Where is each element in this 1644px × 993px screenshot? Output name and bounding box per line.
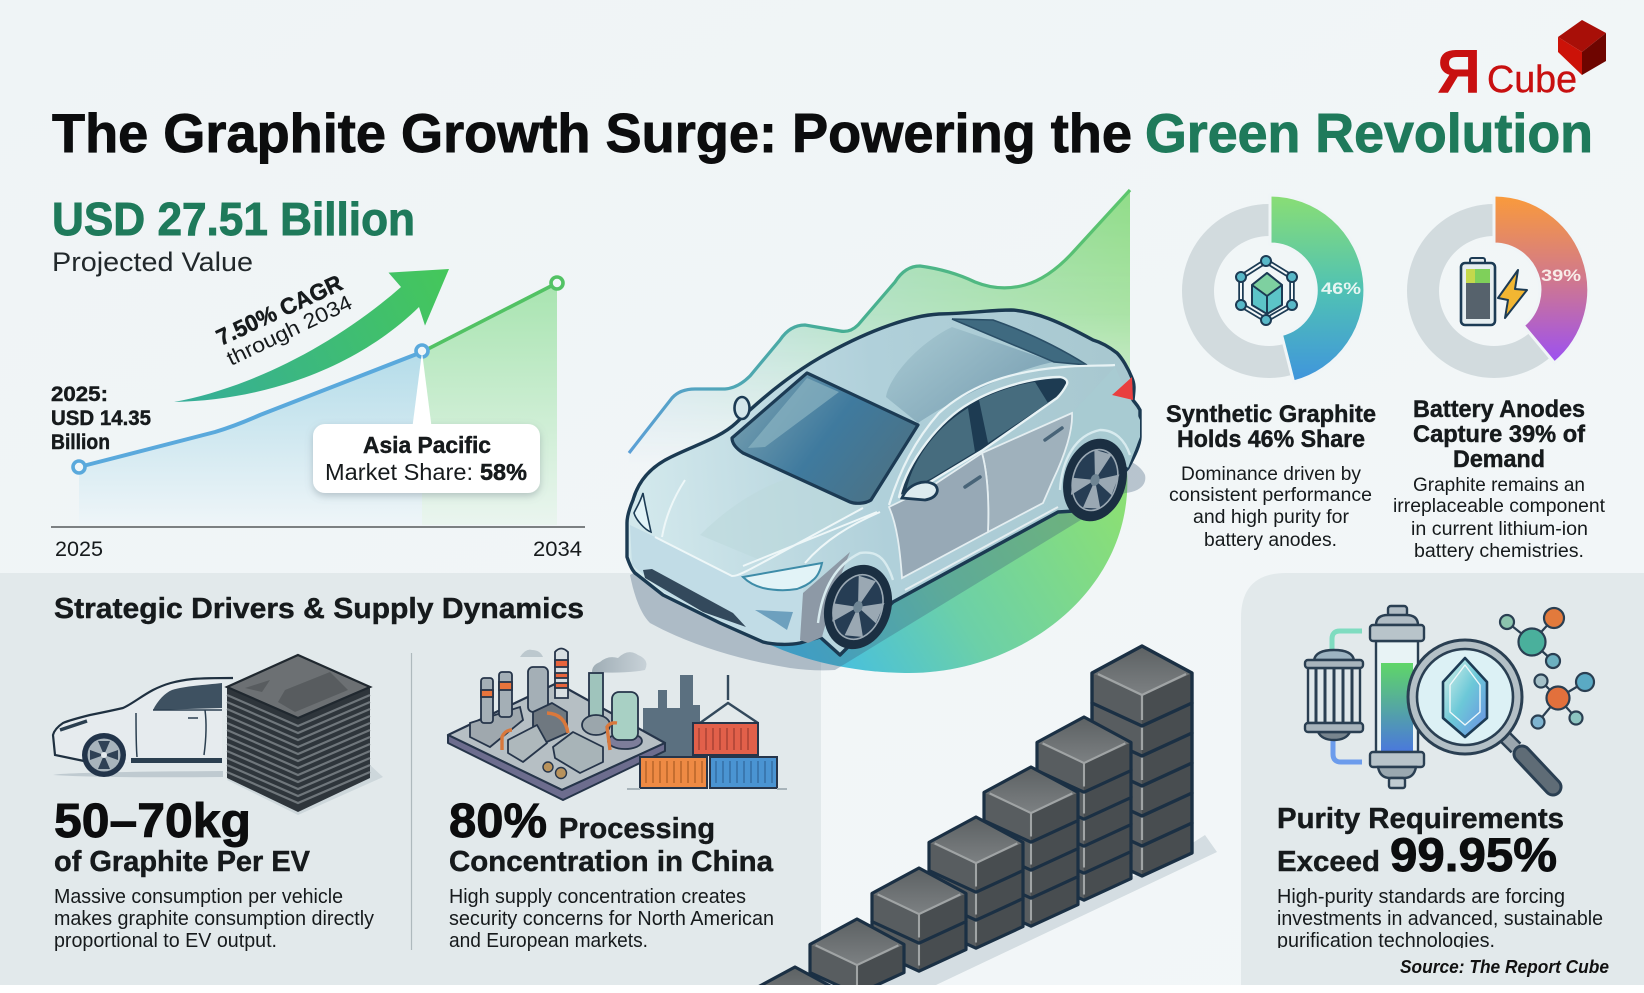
logo cube	[1558, 20, 1606, 75]
column 6	[1092, 646, 1192, 876]
small car lower trim	[131, 758, 222, 763]
logo mark: Я	[1437, 38, 1481, 107]
node 2034	[551, 277, 563, 289]
stairs of graphite blocks	[748, 646, 1217, 993]
text: battery anodes: Demand	[1453, 446, 1545, 473]
panel: purity background	[1241, 573, 1644, 985]
text: battery anodes	[1393, 396, 1606, 562]
green line	[422, 283, 557, 352]
headline value: USD 27.51 Billion	[52, 193, 415, 245]
text: 80% processing: Concentration in China	[449, 846, 774, 878]
blue container	[710, 757, 777, 788]
column 2	[872, 868, 966, 971]
label: 2025 value	[51, 383, 151, 454]
rear quarter panel	[1070, 367, 1140, 468]
callout: Asia Pacific	[313, 352, 540, 493]
text: 50-70kg: proportional to EV output.	[54, 930, 277, 952]
divider	[410, 653, 412, 950]
text: 50-70kg	[54, 795, 374, 952]
column 4	[984, 767, 1078, 926]
bumper	[630, 525, 805, 641]
front side window	[906, 408, 975, 491]
blue area	[79, 352, 422, 525]
small car	[53, 678, 233, 762]
text: 50-70kg: Massive consumption per vehicle	[54, 886, 343, 908]
stairs shadow	[830, 835, 1217, 985]
donut: battery anodes: 39%	[1541, 266, 1581, 285]
car shadow	[630, 440, 1145, 670]
small car roof line	[53, 678, 233, 761]
text: purity requirements: investments in advanced, sustainable	[1277, 908, 1603, 930]
title: Green Revolution	[1145, 102, 1593, 164]
clouds	[520, 650, 646, 673]
front door	[889, 453, 988, 578]
rear wheel	[1054, 431, 1136, 529]
text: 50-70kg: makes graphite consumption directly	[54, 908, 374, 930]
text: purity requirements: purification technologies.	[1277, 930, 1495, 952]
text: battery anodes: irreplaceable component	[1393, 496, 1606, 517]
roof shading	[886, 327, 1054, 423]
text: synthetic graphite: Dominance driven by	[1181, 464, 1361, 485]
molecule two	[1532, 673, 1594, 728]
icon: purification	[1305, 606, 1594, 788]
headline value: Projected Value	[52, 247, 253, 277]
car shadow small	[53, 771, 223, 777]
small car door lines	[136, 710, 222, 757]
label: 2025 value: 2025:	[51, 383, 108, 406]
text: synthetic graphite: Holds 46% Share	[1177, 426, 1365, 453]
windshield	[732, 373, 918, 503]
text: synthetic graphite: battery anodes.	[1204, 530, 1337, 551]
platform	[448, 683, 665, 790]
bottom strip	[0, 985, 1644, 993]
brackets	[1332, 631, 1362, 650]
grille	[643, 569, 746, 627]
magnifier lens	[1408, 640, 1522, 754]
small car headlight	[60, 721, 87, 730]
left block	[470, 707, 523, 747]
callout: Asia Pacific: Asia Pacific	[363, 432, 491, 458]
text: synthetic graphite: Synthetic Graphite	[1166, 401, 1376, 428]
stack shadow	[227, 700, 383, 815]
logo	[1437, 20, 1606, 107]
right headlight	[743, 563, 822, 590]
car body	[627, 310, 1140, 655]
hood shading	[700, 470, 870, 560]
right mirror	[902, 482, 937, 500]
molecule one	[1500, 608, 1564, 668]
source: Source: The Report Cube	[1400, 957, 1609, 977]
text: purity requirements: Purity Requirements	[1277, 803, 1564, 835]
red container	[693, 723, 758, 755]
orange container	[640, 757, 707, 788]
donut: synthetic graphite	[1182, 195, 1365, 382]
blue line	[79, 352, 422, 467]
callout: Asia Pacific: 58%	[480, 459, 527, 485]
text: purity requirements: 99.95%	[1390, 828, 1557, 881]
ground line	[627, 788, 787, 790]
graphite stack	[227, 655, 370, 812]
label: 2025 value: USD 14.35	[51, 407, 151, 430]
text: 50-70kg: of Graphite Per EV	[54, 846, 311, 878]
text: battery anodes: battery chemistries.	[1414, 541, 1584, 562]
CAGR label: through 2034	[223, 291, 356, 371]
text: battery anodes: in current lithium-ion	[1411, 519, 1588, 540]
fender shade	[800, 552, 850, 643]
rear door	[982, 413, 1072, 532]
callout: Asia Pacific: Market Share:	[325, 459, 473, 485]
text: 80% processing: 80%	[449, 795, 547, 848]
beltline white	[889, 365, 1115, 505]
heading: strategic drivers: Strategic Drivers & Supply Dynamics	[54, 593, 584, 625]
growth arrow	[174, 269, 449, 402]
hood lines	[655, 480, 880, 576]
text: battery anodes: Graphite remains an	[1413, 475, 1585, 496]
headline value	[52, 193, 415, 277]
text: purity requirements: High-purity standards are forcing	[1277, 886, 1565, 908]
left mirror	[734, 397, 750, 419]
text: purity requirements	[1277, 803, 1603, 952]
background silhouette	[643, 675, 700, 757]
column 5	[1037, 717, 1131, 900]
tube	[1370, 606, 1424, 788]
axis	[51, 526, 585, 528]
roof glass	[952, 319, 1087, 365]
icon: battery and bolt	[1461, 258, 1527, 325]
green blob under car	[760, 460, 1127, 673]
left headlight	[634, 493, 651, 532]
text: synthetic graphite: consistent performance	[1169, 485, 1372, 506]
chimneys	[481, 648, 642, 749]
crystal	[1443, 658, 1487, 737]
market growth line chart	[51, 277, 585, 561]
text: synthetic graphite	[1166, 401, 1376, 551]
node mid	[416, 345, 428, 357]
axis label 2025: 2025	[55, 538, 103, 561]
orange pipes	[502, 713, 617, 750]
green area	[422, 283, 557, 525]
donut: synthetic graphite: 46%	[1321, 279, 1361, 298]
door handles	[965, 428, 1062, 487]
tail light	[1112, 377, 1133, 400]
label: 2025 value: Billion	[51, 431, 110, 454]
filter	[1305, 650, 1363, 740]
panel: strategic drivers background	[0, 573, 821, 985]
factory buildings	[508, 703, 603, 773]
text: 80% processing: security concerns for North American	[449, 908, 774, 930]
CAGR label: 7.50% CAGR	[212, 269, 347, 351]
text: synthetic graphite: and high purity for	[1193, 507, 1350, 528]
title: The Graphite Growth Surge: Powering the	[52, 102, 1132, 164]
small car wheel	[82, 733, 126, 777]
icon: car with graphite stack	[53, 655, 383, 815]
text: 50-70kg: 50–70kg	[54, 795, 251, 848]
barrels	[543, 762, 566, 778]
small car window	[153, 683, 222, 710]
car	[627, 310, 1145, 670]
column 0	[758, 965, 832, 985]
wheel arches	[818, 430, 1130, 623]
sill	[905, 507, 1058, 590]
text: purity requirements: Exceed	[1277, 846, 1380, 878]
donut: battery anodes	[1407, 195, 1589, 378]
air intake	[755, 610, 793, 630]
node 2025	[73, 461, 85, 473]
column 3	[929, 817, 1023, 948]
text: 80% processing: High supply concentration creates	[449, 886, 746, 908]
magnifier handle	[1503, 735, 1553, 787]
windshield reflection	[748, 378, 839, 448]
crane hook	[700, 675, 758, 723]
text: 80% processing: and European markets.	[449, 930, 648, 952]
text: 80% processing	[449, 795, 774, 952]
column 1	[810, 919, 904, 993]
text: battery anodes: Capture 39% of	[1413, 421, 1586, 448]
logo word: Cube	[1487, 59, 1577, 101]
icon: crystal lattice	[1236, 256, 1297, 325]
big growth chart behind car	[629, 190, 1130, 480]
text: 80% processing: Processing	[559, 813, 715, 845]
icon: factory and containers	[448, 648, 787, 800]
text: battery anodes: Battery Anodes	[1413, 396, 1585, 423]
front wheel	[813, 556, 903, 658]
axis label 2034: 2034	[533, 538, 582, 561]
side window frame	[899, 377, 1067, 497]
rear side window	[979, 382, 1048, 443]
